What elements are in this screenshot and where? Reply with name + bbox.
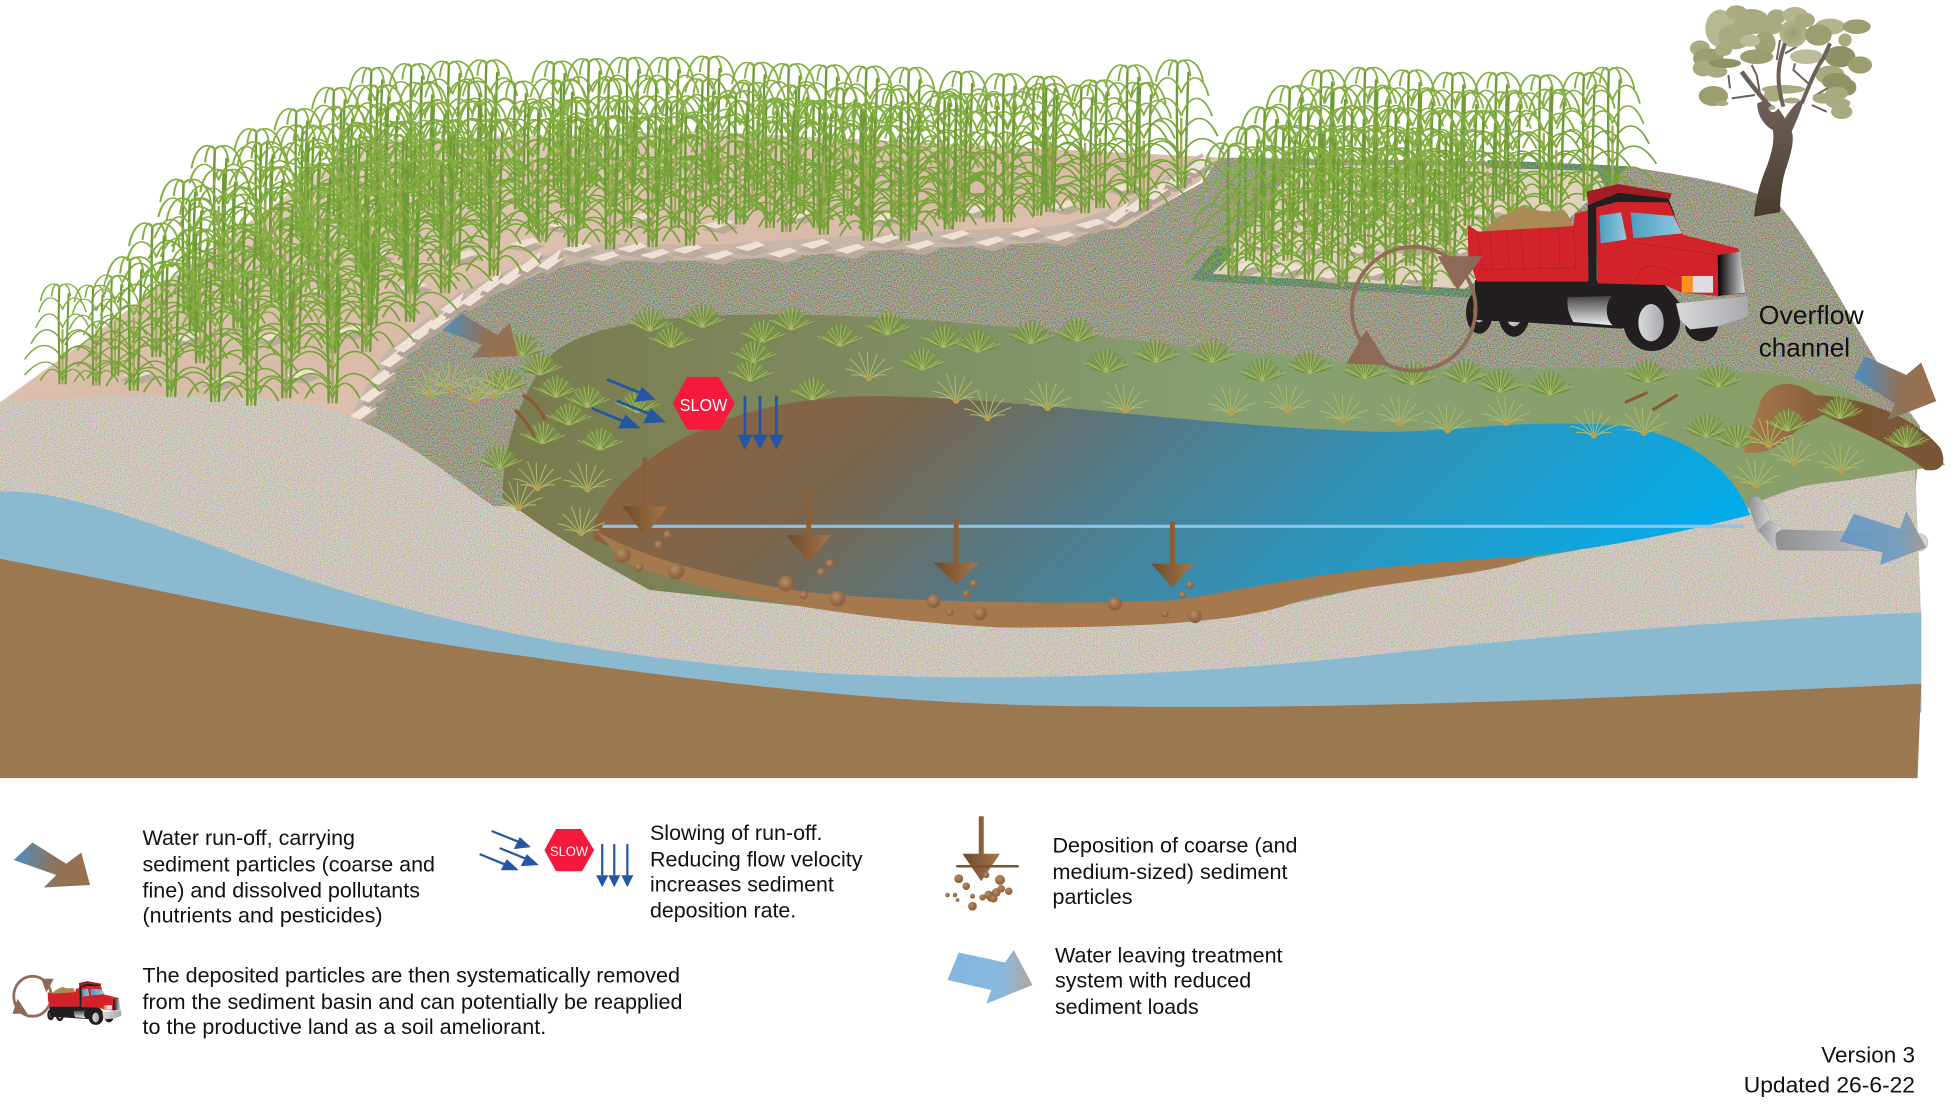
text: slowing: deposition rate. [650,898,796,922]
text: deposition: medium-sized) sediment [1052,860,1288,884]
sediment basin water [594,396,1750,612]
dump truck [1466,184,1748,351]
label: overflow channel: channel [1759,332,1850,362]
sandy soil layer [0,396,1921,700]
legend [13,816,1298,1039]
tree [1690,5,1872,217]
deposition arrows with particles [614,458,1202,623]
second paddock sugar cane [1186,67,1656,290]
batter plants: grass tufts [408,304,1929,536]
text: treated water: Water leaving treatment [1055,943,1283,967]
text: run-off [143,826,435,928]
rocky field edge [120,152,1214,425]
second paddock ground [1200,165,1625,292]
legend: deposition [945,816,1298,911]
icon: slow sign with arrows [480,829,633,887]
main cross-section diagram [0,5,1945,778]
water level line [602,525,1744,528]
text: treated water [1055,944,1283,1019]
paddock sugar cane [25,56,1225,405]
text: removal [143,964,683,1039]
sediment reuse cycle arrows [1346,247,1482,371]
erosion marks [515,392,1678,438]
second paddock soil flakes [1226,206,1508,286]
text: run-off: fine) and dissolved pollutants [143,878,420,902]
version note: Updated 26-6-22 [1744,1072,1915,1097]
text: run-off: (nutrients and pesticides) [143,903,383,927]
legend: slowing [480,821,863,922]
overflow channel mound [1744,384,1943,470]
text: deposition: particles [1052,885,1132,909]
legend: removal [13,964,683,1039]
text: run-off: Water run-off, carrying [143,826,355,850]
icon: deposition arrow and particles [945,816,1019,911]
outlet pipe [1748,496,1928,551]
text: removal: The deposited particles are then systematically removed [143,963,680,987]
text: slowing: increases sediment [650,872,834,896]
vegetated basin batter [502,315,1945,625]
text: deposition [1052,834,1298,909]
version note: Version 3 [1821,1042,1915,1067]
text: removal: to the productive land as a soil ameliorant. [143,1015,546,1039]
text: slowing [650,821,863,922]
text: treated water: system with reduced [1055,968,1251,992]
groundwater band [0,491,1921,712]
text: run-off: sediment particles (coarse and [143,852,435,876]
text: deposition: Deposition of coarse (and [1052,833,1297,857]
label: overflow channel: Overflow [1759,300,1865,330]
flow slowing arrows and SLOW sign [592,377,784,450]
legend: run-off [14,826,435,928]
cropped paddock ground [0,131,1219,431]
second paddock green margin [1190,160,1628,298]
icon: water arrow [948,950,1032,1004]
text: treated water: sediment loads [1055,995,1199,1019]
text: slowing: Slowing of run-off. [650,821,823,845]
deposited sediment [595,530,1538,628]
version note [1744,1042,1915,1098]
arrow: overflow out [1854,356,1936,420]
gravel batter surface [350,158,1920,588]
subsoil [0,559,1921,778]
icon: truck with cycle [13,976,121,1025]
text: slowing: Reducing flow velocity [650,847,863,871]
icon: run-off arrow [14,842,90,888]
arrow: treated water out [1840,511,1926,565]
text: removal: from the sediment basin and can potentially be reapplied [143,990,683,1014]
arrow: run-off in [442,314,518,358]
legend: treated water [948,944,1283,1019]
label: overflow channel [1759,300,1865,362]
